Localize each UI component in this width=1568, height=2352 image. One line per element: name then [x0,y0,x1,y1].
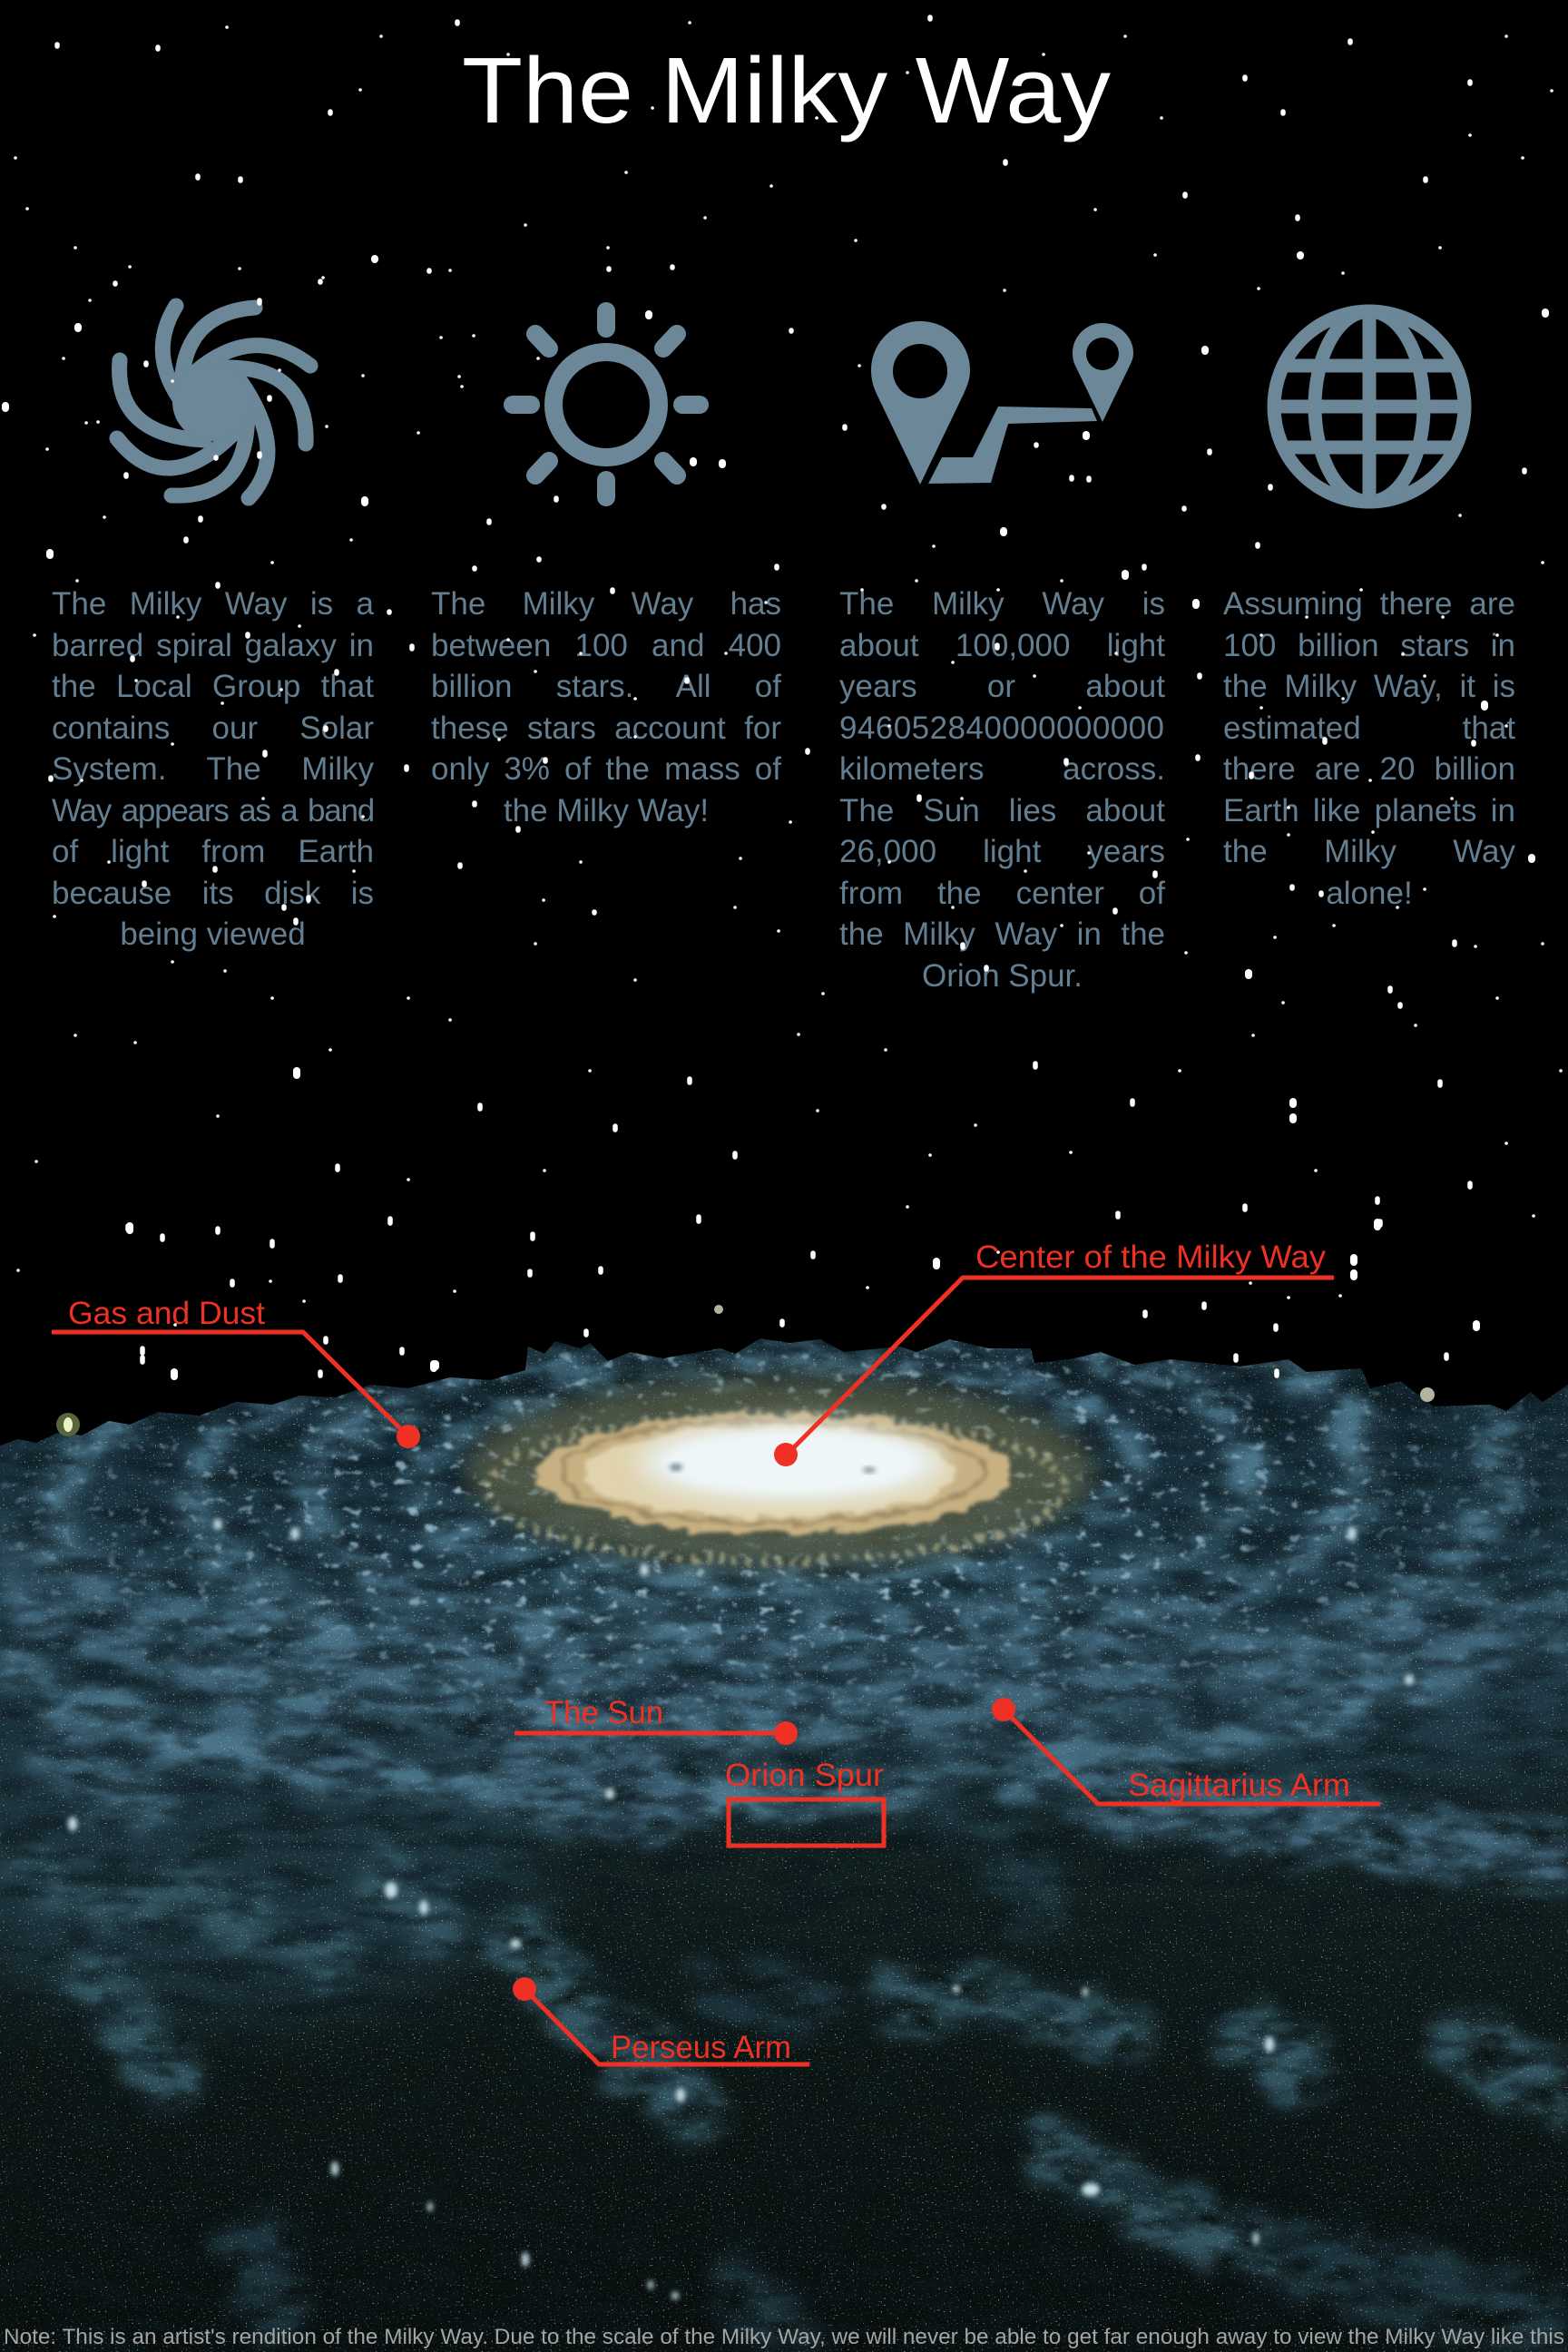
text block: star count: The Milky Way has [431,586,781,622]
text block: star count: only 3% of the mass of [431,751,781,787]
callout: The Sun [514,1695,798,1745]
text block: size and location: the Milky Way in the [839,916,1165,952]
callout: Gas and Dust: Gas and Dust [68,1296,265,1331]
starfield [0,0,1568,1397]
text block: galaxy description: The Milky Way is a [52,586,374,622]
icon: spiral galaxy [117,306,310,498]
satellite galaxy glow [56,1413,80,1436]
grey distant stars [714,1305,1435,1402]
text block: earth-like planets: 100 billion stars in [1223,628,1515,662]
text block: galaxy description: contains our Solar [52,710,374,746]
text block: earth-like planets: alone! [1326,875,1413,911]
icon: route between two map pins [871,321,1133,485]
callout: Gas and Dust [52,1296,420,1448]
text block: size and location [839,586,1165,993]
text block: size and location: kilometers across. [839,751,1165,787]
text block: galaxy description: the Local Group that [52,669,374,704]
text block: size and location: from the center of [839,875,1165,911]
bright star clusters [68,1519,1414,2299]
callout: Perseus Arm: Perseus Arm [611,2030,791,2065]
background: galaxy illustration [0,1338,1568,2352]
text block: galaxy description: barred spiral galaxy in [52,628,374,662]
dark dust lanes [0,1334,1568,1969]
text block: star count: between 100 and 400 [431,628,781,662]
text block: size and location: Orion Spur. [922,958,1083,993]
callout: Orion Spur: Orion Spur [725,1758,884,1793]
callout: Sagittarius Arm [992,1698,1380,1804]
text block: size and location: The Milky Way is [839,586,1165,622]
text block: size and location: 26,000 light years [839,834,1165,869]
callout: Center of the Milky Way: Center of the Milky Way [975,1240,1327,1275]
text block: galaxy description: Way appears as a band [52,793,374,828]
text block: earth-like planets: the Milky Way, it is [1223,669,1515,704]
callout: Perseus Arm [513,1977,809,2065]
speckled star field [0,1334,1568,2352]
text block: galaxy description: because its disk is [52,875,374,911]
star clumps in the disk [0,1341,1568,1759]
icon: sun [513,311,700,497]
text block: earth-like planets: the Milky Way [1223,834,1515,869]
text block: earth-like planets: Earth like planets in [1223,793,1515,828]
icons row [109,298,1472,508]
callout: The Sun: The Sun [544,1695,663,1730]
icon: globe [1274,311,1465,502]
galactic core [467,1377,1093,1566]
text block: star count [431,586,781,828]
text block: galaxy description: being viewed [120,916,306,952]
callout: Center of the Milky Way [774,1240,1334,1466]
text block: earth-like planets: Assuming there are [1223,586,1515,622]
text block: galaxy description [52,586,374,952]
text block: earth-like planets: estimated that [1223,710,1515,746]
text block: earth-like planets: there are 20 billion [1223,751,1515,787]
text block: earth-like planets [1223,586,1515,911]
text block: star count: these stars account for [431,710,781,746]
note text: Note: This is an artist's rendition of the Milky Way. Due to the scale of the Milky Way, we will never be able to get far enough away to view the Milky Way like this [4,2325,1564,2349]
text block: star count: billion stars. All of [431,669,781,704]
text block: size and location: years or about [839,669,1165,704]
text block: size and location: about 100,000 light [839,628,1165,662]
text block: galaxy description: of light from Earth [52,834,374,869]
text block: star count: the Milky Way! [504,793,709,828]
callout: Orion Spur [725,1758,884,1846]
title: The Milky Way [462,38,1112,142]
text block: galaxy description: System. The Milky [52,751,374,787]
text block: size and location: The Sun lies about [839,793,1165,828]
callout: Sagittarius Arm: Sagittarius Arm [1128,1768,1350,1803]
spiral arms [0,1338,1568,2352]
text block: size and location: 946052840000000000 [839,710,1164,746]
